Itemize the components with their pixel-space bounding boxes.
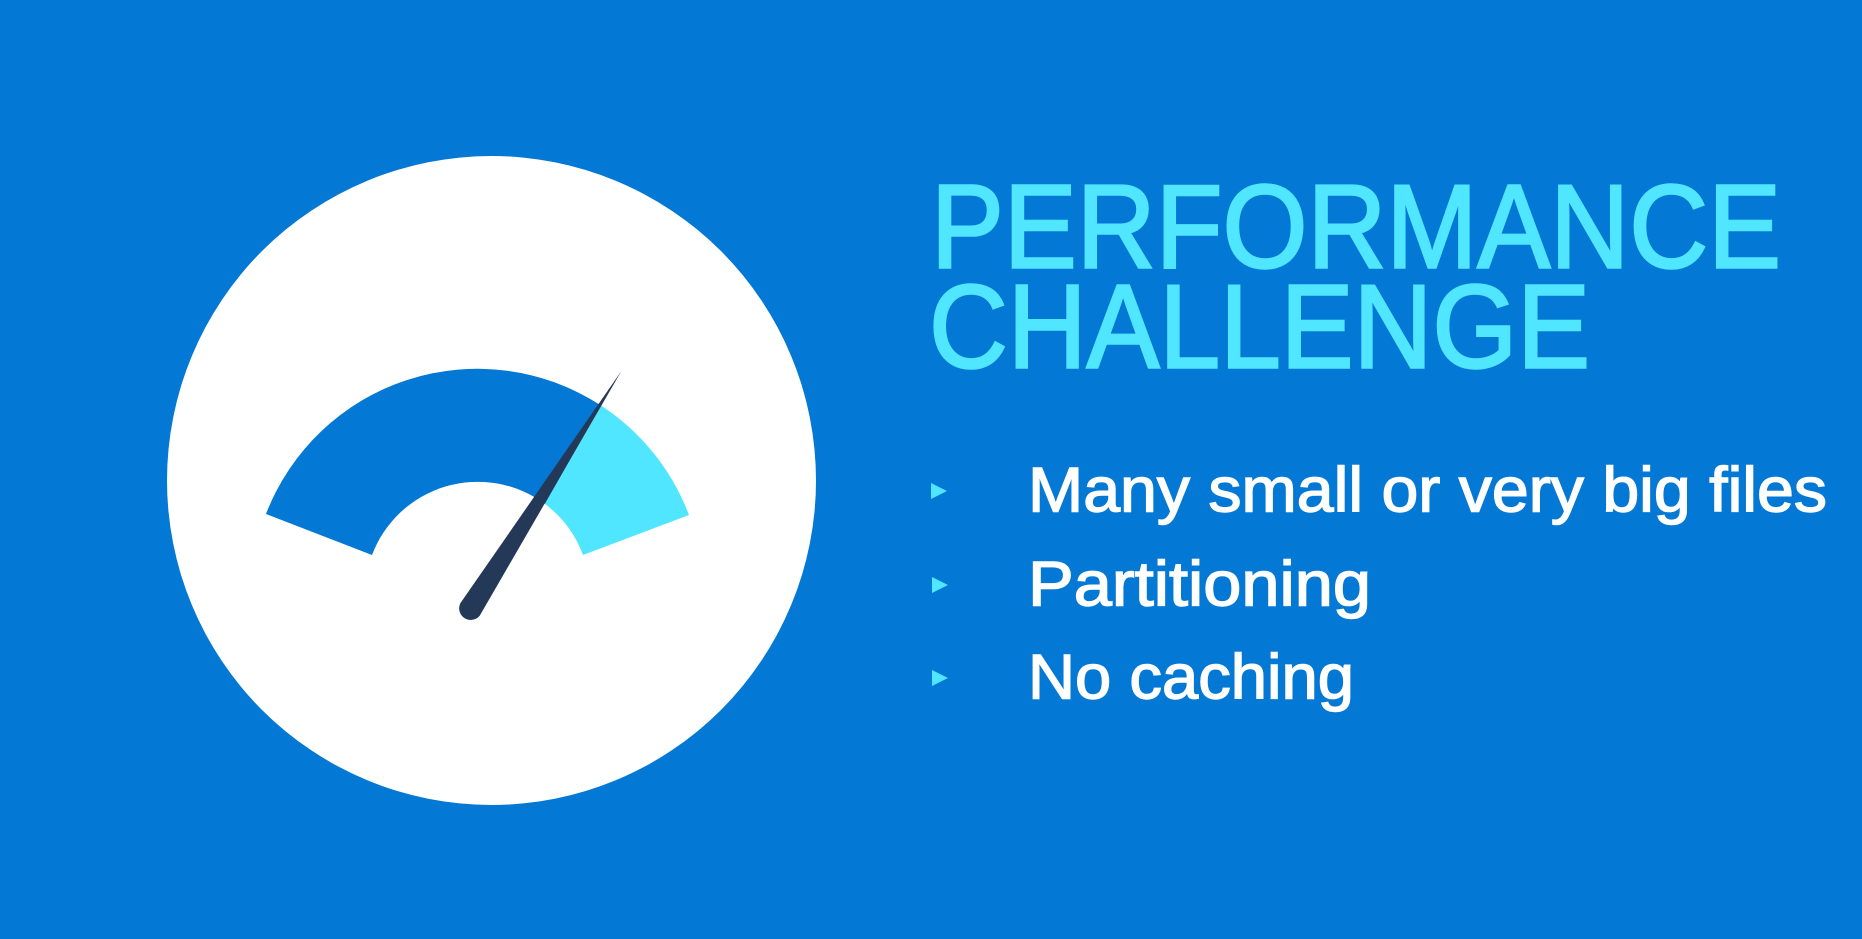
gauge arc: cyan high range: [545, 406, 689, 555]
title: PERFORMANCE: [931, 160, 1781, 294]
icon: speedometer gauge: [167, 156, 816, 805]
bullet: no caching: No caching: [1028, 642, 1354, 712]
white gauge disc: [167, 156, 816, 805]
bullet: many small or very big files: Many small or very big files: [1028, 456, 1827, 526]
gauge needle: [459, 371, 621, 620]
bullet: partitioning: Partitioning: [1028, 550, 1371, 620]
gauge arc: blue range: [266, 369, 601, 555]
title: CHALLENGE: [929, 260, 1590, 394]
bullet list: [931, 456, 1827, 712]
title: [929, 160, 1781, 394]
